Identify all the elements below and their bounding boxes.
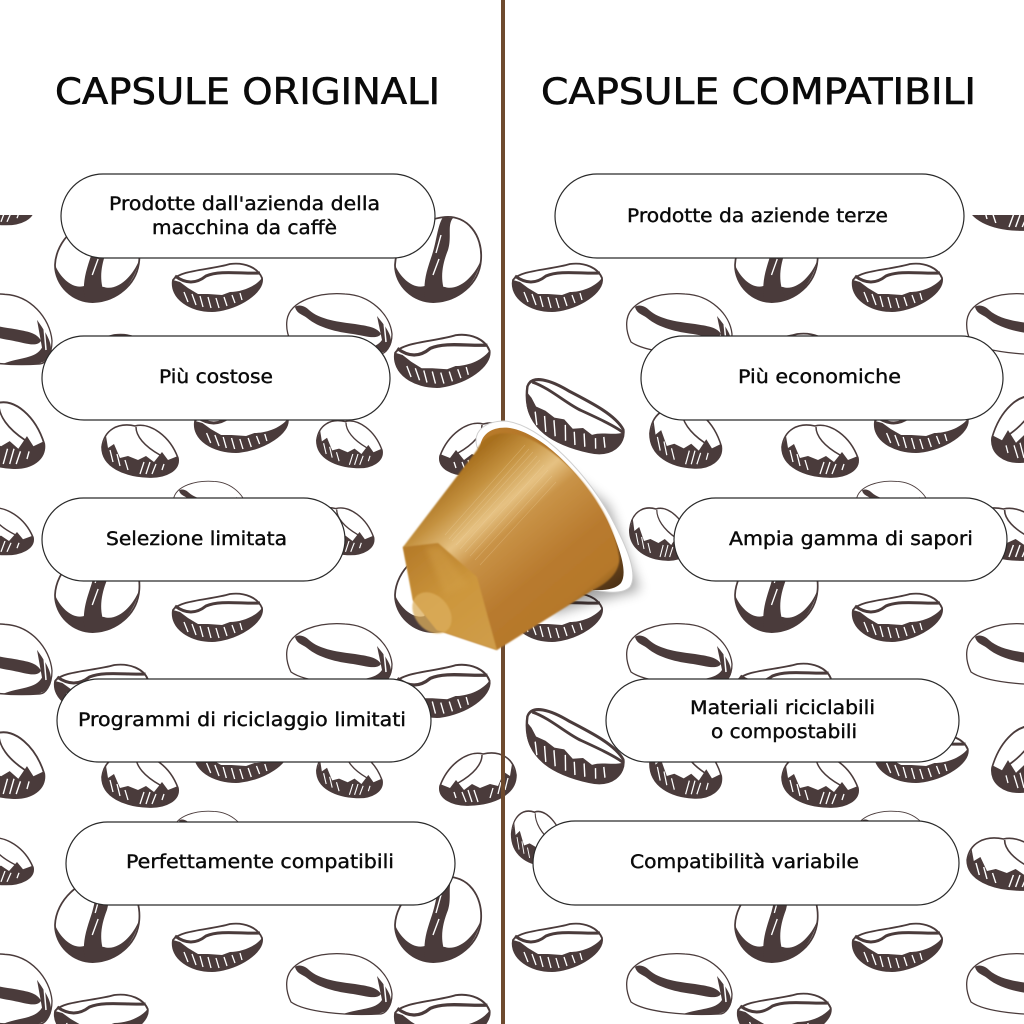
- pill: perfectly compatible: Perfettamente compatibili: [126, 852, 394, 873]
- pill: limited recycling: [57, 679, 431, 762]
- pill: produced by machine maker: Prodotte dall'azienda della: [109, 194, 380, 215]
- title: capsule originali: CAPSULE ORIGINALI: [55, 70, 440, 113]
- pill: wide flavour range: [674, 498, 1007, 581]
- pill: produced by machine maker: [61, 174, 435, 258]
- pill: limited selection: [42, 498, 345, 581]
- pill: produced by machine maker: macchina da caffè: [152, 218, 337, 239]
- pill: variable compatibility: Compatibilità variabile: [630, 852, 859, 873]
- title: capsule compatibili: CAPSULE COMPATIBILI: [541, 70, 976, 113]
- pill: recyclable materials: Materiali riciclabili: [690, 698, 875, 719]
- pill: recyclable materials: [606, 679, 959, 762]
- pill: limited selection: Selezione limitata: [106, 529, 287, 550]
- pill: third-party producers: [555, 174, 964, 258]
- pill: variable compatibility: [533, 821, 959, 905]
- pill: third-party producers: Prodotte da aziende terze: [627, 206, 888, 227]
- pill: recyclable materials: o compostabili: [711, 722, 857, 743]
- pill: cheaper: [641, 336, 1003, 420]
- pill: cheaper: Più economiche: [738, 367, 901, 388]
- pill: wide flavour range: Ampia gamma di sapori: [729, 529, 973, 550]
- pill: limited recycling: Programmi di riciclaggio limitati: [78, 710, 406, 731]
- pill: more expensive: Più costose: [159, 367, 273, 388]
- panel: capsule compatibili features: [533, 174, 1007, 905]
- panel: capsule originali features: [42, 174, 455, 905]
- pill: perfectly compatible: [66, 822, 455, 905]
- pill: more expensive: [42, 336, 390, 420]
- central divider line: [501, 0, 505, 1024]
- icon: golden coffee capsule: [403, 421, 640, 650]
